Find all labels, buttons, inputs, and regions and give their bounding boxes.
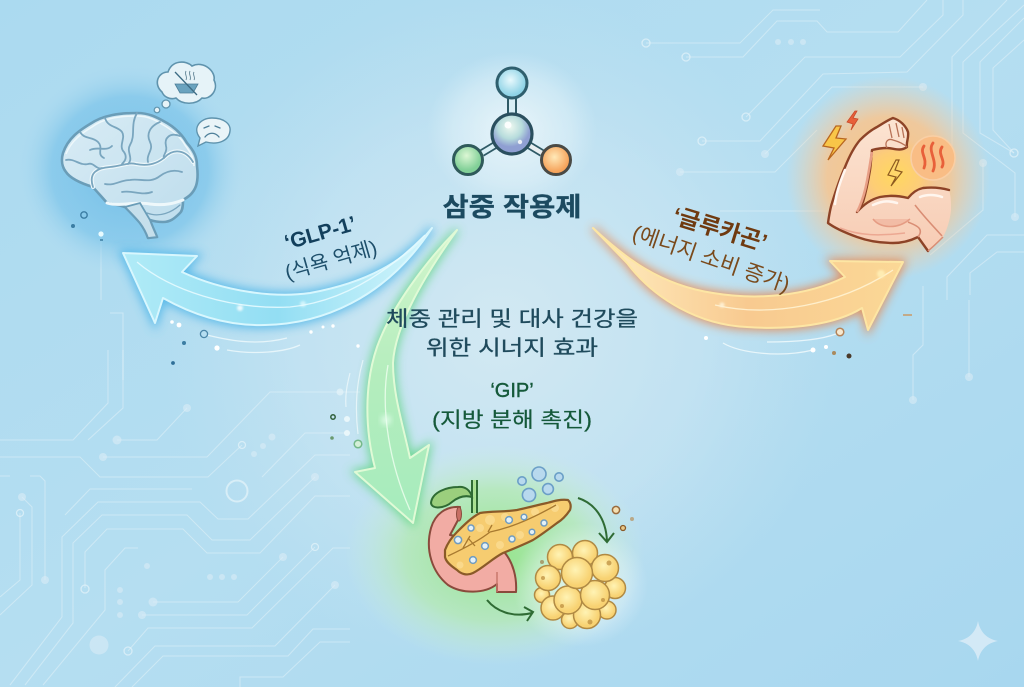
label: glucagon: ‘글루카곤’ xyxy=(670,202,770,256)
icon: flexed muscle arm xyxy=(786,76,990,280)
label: GIP: ‘GIP’ xyxy=(490,380,534,402)
label: GLP-1: (식욕 억제) xyxy=(282,236,380,285)
sparkles under blue arrow xyxy=(170,320,360,365)
thought cloud xyxy=(157,62,215,103)
center text: synergy effect xyxy=(386,308,638,360)
label: GIP xyxy=(432,380,592,432)
arrow: glucagon orange xyxy=(593,228,903,330)
center text: synergy effect: 위한 시너지 효과 xyxy=(426,337,598,360)
speech bubble sad face xyxy=(197,118,230,146)
arrow: GLP-1 blue xyxy=(123,228,432,325)
bubbles xyxy=(518,467,563,502)
process arrows xyxy=(487,498,614,621)
duodenum xyxy=(429,507,516,592)
gallbladder xyxy=(431,487,472,507)
title: 삼중 작용제 xyxy=(442,192,582,222)
label: GLP-1 xyxy=(282,212,380,285)
icon: molecule triple agonist xyxy=(427,52,597,208)
icon: sparkle watermark xyxy=(958,621,998,661)
lightning bolts xyxy=(823,126,846,160)
fat cells xyxy=(534,540,626,628)
heat circle xyxy=(911,136,955,180)
sparkles under orange arrow xyxy=(704,315,912,358)
arrow: GIP green xyxy=(355,230,457,523)
icon: brain with thought bubbles xyxy=(18,62,242,275)
label: GIP: (지방 분해 촉진) xyxy=(432,409,592,432)
center text: synergy effect: 체중 관리 및 대사 건강을 xyxy=(386,308,638,331)
pancreas xyxy=(445,500,571,574)
label: GLP-1: ‘GLP-1’ xyxy=(282,212,359,255)
sparkles beside green arrow xyxy=(330,360,363,448)
icon: pancreas and fat cells xyxy=(345,445,648,665)
label: glucagon: (에너지 소비 증가) xyxy=(629,221,793,297)
